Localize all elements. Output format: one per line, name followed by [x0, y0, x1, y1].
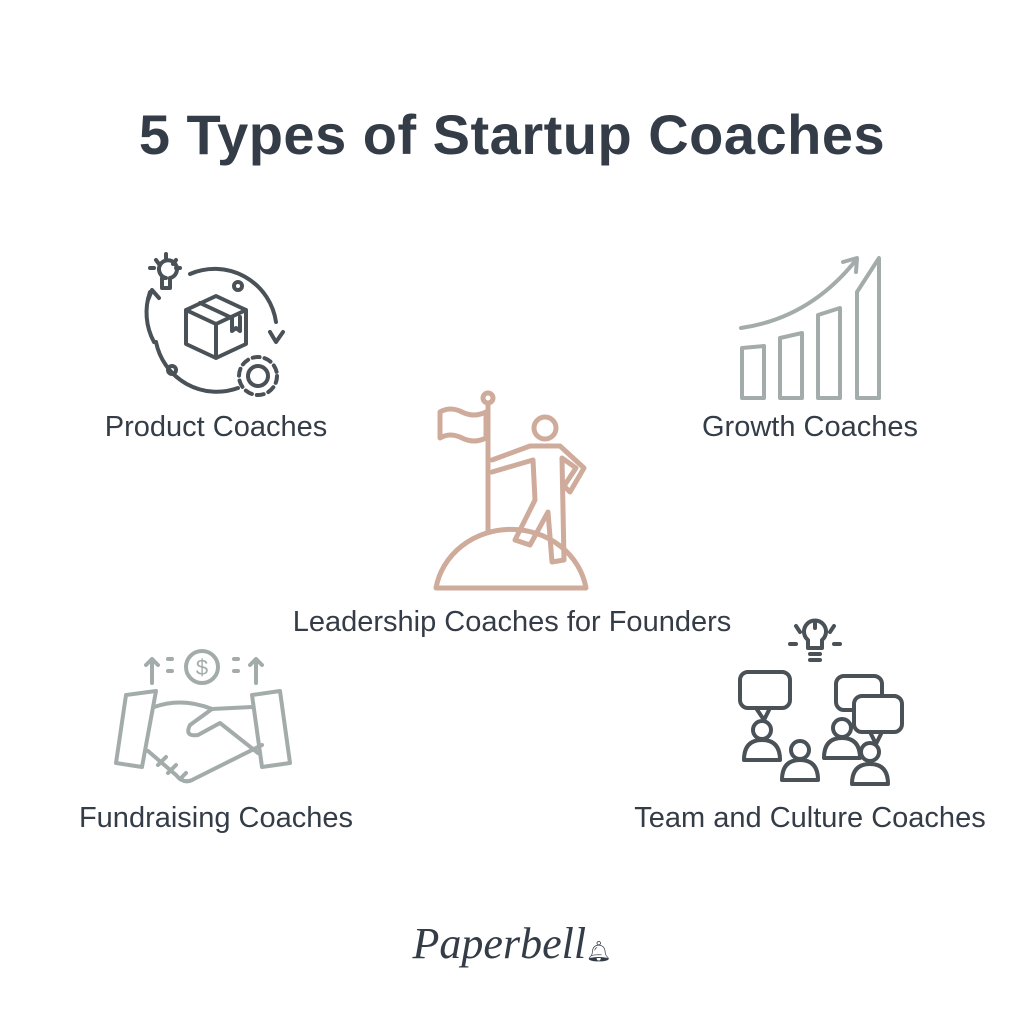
icon: fundraising handshake: $: [196, 655, 208, 680]
icon: fundraising handshake: [114, 649, 292, 784]
title: 5 Types of Startup Coaches: [139, 103, 885, 166]
label: team: Team and Culture Coaches: [634, 802, 986, 834]
label: fundraising: Fundraising Coaches: [79, 802, 353, 834]
icon: product cycle: [144, 252, 286, 397]
label: product: Product Coaches: [105, 411, 327, 443]
label: growth: Growth Coaches: [702, 411, 918, 443]
icon: team bubbles: [738, 618, 904, 786]
icon: growth chart: [739, 256, 881, 400]
label: leadership: Leadership Coaches for Founders: [293, 606, 731, 638]
logo: Paperbell🔔︎: [413, 919, 611, 968]
icon: leader on mountain: [434, 390, 588, 590]
